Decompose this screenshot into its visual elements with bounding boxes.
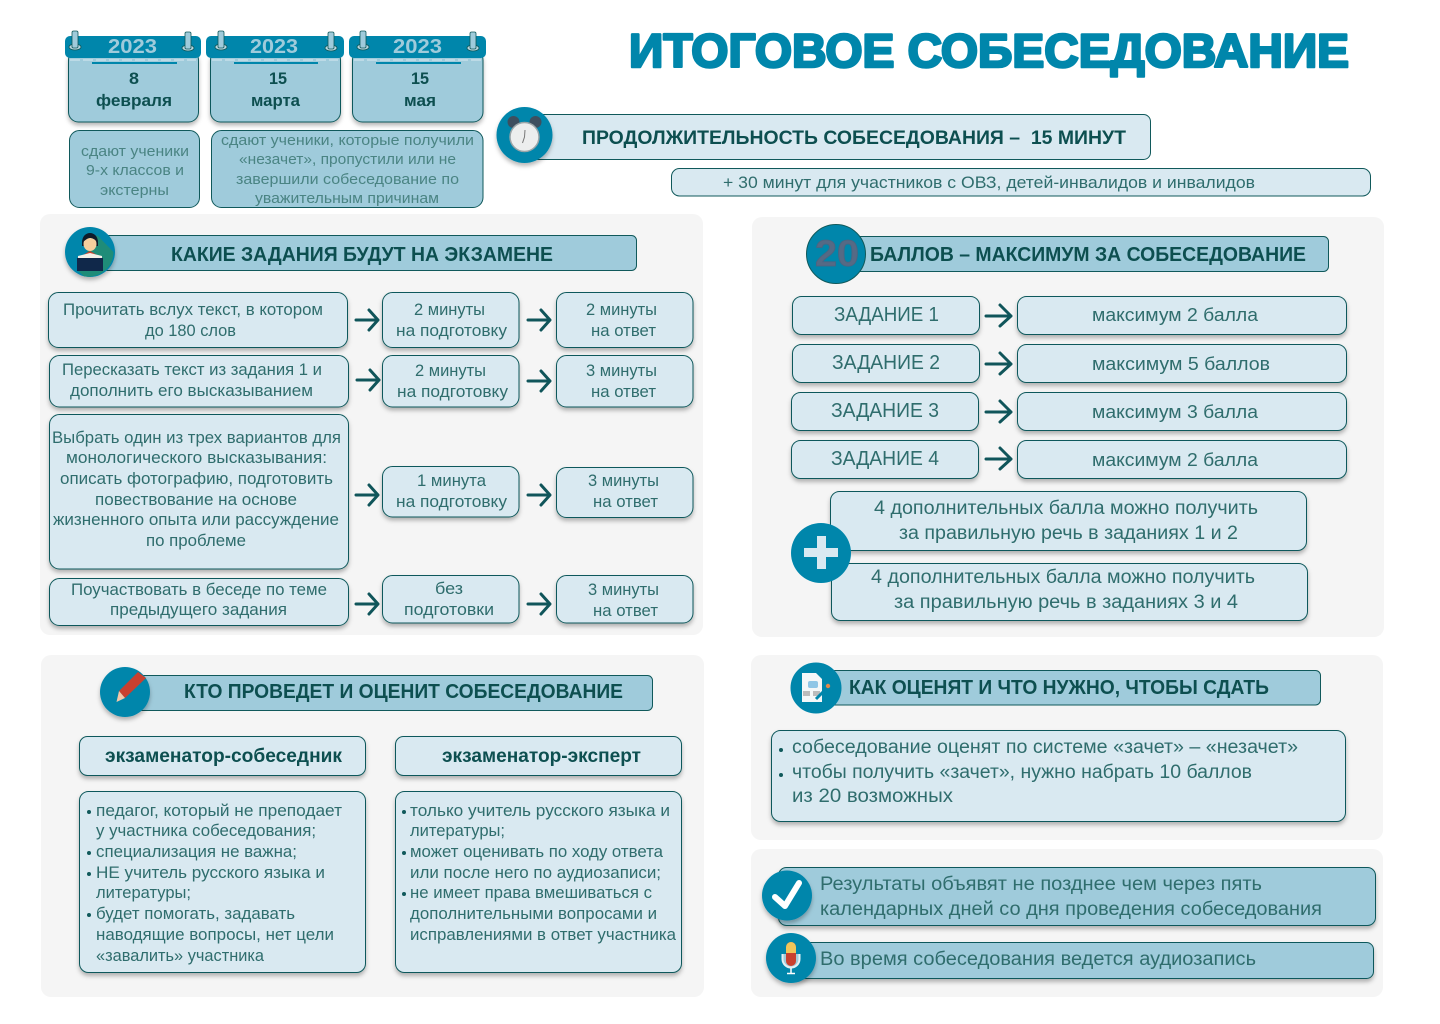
calendar: 15 марта: 15 — [269, 69, 287, 88]
note: кто сдаёт 15 марта и 15 мая: «незачет», пропустили или не — [239, 151, 456, 168]
extra time note — [672, 168, 1370, 196]
duration banner: ПРОДОЛЖИТЕЛЬНОСТЬ СОБЕСЕДОВАНИЯ – 15 МИНУТ — [582, 128, 1126, 149]
score row: задание 4: максимум 2 балла — [1092, 450, 1259, 470]
bonus points: 4 дополнительных балла можно получить — [874, 498, 1258, 519]
criteria box: чтобы получить «зачет», нужно набрать 10 баллов — [792, 762, 1252, 783]
score row: задание 4: ЗАДАНИЕ 4 — [831, 448, 939, 470]
icon: pencil — [116, 672, 146, 702]
score row: задание 1 — [792, 296, 1346, 334]
note: кто сдаёт 15 марта и 15 мая: сдают ученики, которые получили — [221, 132, 474, 149]
score row: задание 2: максимум 5 баллов — [1092, 354, 1270, 374]
task row 3: 1 минута — [417, 471, 487, 490]
note: кто сдаёт 15 марта и 15 мая: завершили собеседование по — [236, 171, 459, 188]
heading: какие задания: КАКИЕ ЗАДАНИЯ БУДУТ НА ЭКЗАМЕНЕ — [171, 244, 553, 266]
score row: задание 1: максимум 2 балла — [1092, 305, 1259, 325]
task row 3: на подготовку — [396, 492, 508, 511]
task row 2: дополнить его высказыванием — [70, 381, 313, 400]
column: экзаменатор-собеседник — [80, 736, 366, 972]
panel: как оценят — [751, 655, 1383, 840]
score row: задание 2 — [792, 344, 1346, 382]
criteria box: из 20 возможных — [792, 786, 954, 807]
task row 3: описать фотографию, подготовить — [60, 469, 333, 488]
task row 2: 2 минуты — [415, 361, 486, 380]
calendar: 15 мая — [349, 31, 486, 122]
column: экзаменатор-эксперт: или после него по аудиозаписи; — [410, 863, 661, 882]
bonus points: 4 дополнительных балла можно получить — [871, 567, 1255, 588]
calendar: 8 февраля: 8 — [129, 69, 139, 88]
calendar: 15 марта: марта — [251, 91, 301, 110]
callout: аудиозапись — [766, 933, 1374, 983]
task row 1: до 180 слов — [145, 321, 236, 340]
score row: задание 3: ЗАДАНИЕ 3 — [831, 400, 939, 422]
task row 2: Пересказать текст из задания 1 и — [62, 360, 322, 379]
task row 3: 3 минуты — [588, 471, 659, 490]
panel: кто проведет — [41, 655, 704, 997]
title: ИТОГОВОЕ СОБЕСЕДОВАНИЕ — [629, 24, 1349, 77]
note: кто сдаёт 8 февраля — [70, 130, 200, 208]
calendar: 15 марта — [206, 31, 344, 122]
column: экзаменатор-эксперт: дополнительными вопросами и — [410, 904, 657, 923]
task row 4: Поучаствовать в беседе по теме — [71, 580, 327, 599]
icon: microphone — [766, 933, 816, 983]
callout: результаты: Результаты объявят не позднее чем через пять — [820, 874, 1262, 895]
score row: задание 2: ЗАДАНИЕ 2 — [832, 352, 940, 374]
heading: 20 баллов — [806, 224, 1328, 284]
calendar: 15 мая: 2023 — [393, 36, 442, 58]
column: экзаменатор-эксперт: только учитель русского языка и — [410, 801, 670, 820]
task row 2 — [50, 356, 693, 407]
score row: задание 3 — [792, 392, 1346, 430]
heading: кто проведет: КТО ПРОВЕДЕТ И ОЦЕНИТ СОБЕСЕДОВАНИЕ — [184, 681, 623, 703]
icon: document with pen — [802, 673, 830, 702]
panel: баллы — [752, 217, 1384, 637]
column: экзаменатор-эксперт: экзаменатор-эксперт — [442, 746, 641, 767]
icon: plus — [791, 523, 851, 583]
calendar: 15 мая: 15 — [411, 69, 429, 88]
icon: check mark — [762, 870, 812, 920]
column: экзаменатор-эксперт: литературы; — [410, 821, 505, 840]
column: экзаменатор-собеседник: специализация не важна; — [96, 842, 297, 861]
criteria box — [772, 730, 1346, 822]
calendar: 15 марта: 2023 — [250, 36, 298, 58]
bonus points: за правильную речь в заданиях 3 и 4 — [894, 592, 1238, 613]
task row 4: на ответ — [593, 601, 658, 620]
task row 4: без — [435, 579, 463, 598]
callout: результаты — [762, 868, 1376, 926]
task row 4: 3 минуты — [588, 580, 659, 599]
column: экзаменатор-собеседник: педагог, который не преподает — [96, 801, 342, 820]
calendar: 8 февраля — [65, 31, 201, 122]
column: экзаменатор-собеседник: литературы; — [96, 883, 191, 902]
column: экзаменатор-собеседник: наводящие вопросы, нет цели — [96, 925, 334, 944]
task row 2: на ответ — [591, 382, 656, 401]
column: экзаменатор-эксперт: может оценивать по ходу ответа — [410, 842, 664, 861]
score row: задание 3: максимум 3 балла — [1092, 402, 1259, 422]
icon: reader with book — [77, 233, 114, 277]
column: экзаменатор-эксперт: не имеет права вмешиваться с — [410, 883, 652, 902]
task row 3: на ответ — [593, 492, 658, 511]
task row 2: на подготовку — [397, 382, 509, 401]
note: кто сдаёт 8 февраля: 9-х классов и — [86, 162, 184, 179]
heading: как оценят: КАК ОЦЕНЯТ И ЧТО НУЖНО, ЧТОБЫ СДАТЬ — [849, 677, 1269, 699]
task row 1: на подготовку — [396, 321, 508, 340]
task row 4: подготовки — [404, 600, 494, 619]
task row 3: монологического высказывания: — [66, 448, 327, 467]
note: кто сдаёт 8 февраля: экстерны — [100, 182, 169, 199]
column: экзаменатор-эксперт: исправлениями в ответ участника — [410, 925, 677, 944]
column: экзаменатор-собеседник: у участника собеседования; — [96, 821, 316, 840]
task row 4: предыдущего задания — [110, 600, 287, 619]
note: кто сдаёт 8 февраля: сдают ученики — [81, 143, 189, 160]
task row 3: жизненного опыта или рассуждение — [53, 510, 339, 529]
panel: задания на экзамене — [40, 214, 703, 635]
task row 3: повествование на основе — [95, 490, 297, 509]
column: экзаменатор-собеседник: «завалить» участника — [96, 946, 265, 965]
task row 2: 3 минуты — [586, 361, 657, 380]
bonus points — [791, 492, 1308, 620]
callout: результаты: календарных дней со дня проведения собеседования — [820, 899, 1322, 920]
column: экзаменатор-эксперт — [396, 736, 682, 972]
column: экзаменатор-собеседник: НЕ учитель русского языка и — [96, 863, 325, 882]
task row 3: Выбрать один из трех вариантов для — [52, 428, 341, 447]
duration banner — [496, 107, 1150, 163]
panel: результаты и аудиозапись — [751, 849, 1383, 997]
extra time note: + 30 минут для участников с ОВЗ, детей-инвалидов и инвалидов — [723, 173, 1255, 192]
column: экзаменатор-собеседник: экзаменатор-собеседник — [105, 746, 342, 767]
heading: кто проведет — [100, 667, 652, 717]
task row 1 — [48, 292, 693, 348]
bonus points: за правильную речь в заданиях 1 и 2 — [899, 523, 1238, 544]
heading: 20 баллов: БАЛЛОВ – МАКСИМУМ ЗА СОБЕСЕДОВАНИЕ — [870, 244, 1306, 266]
heading: какие задания — [65, 227, 636, 277]
calendar: 8 февраля: февраля — [96, 91, 172, 110]
note: кто сдаёт 15 марта и 15 мая: уважительным причинам — [255, 190, 439, 207]
score row: задание 1: ЗАДАНИЕ 1 — [834, 304, 939, 326]
calendar: 15 мая: мая — [404, 91, 436, 110]
task row 3: по проблеме — [146, 531, 246, 550]
task row 4 — [50, 576, 693, 626]
callout: аудиозапись: Во время собеседования ведется аудиозапись — [820, 949, 1256, 970]
task row 1: 2 минуты — [414, 300, 485, 319]
icon: alarm clock — [508, 116, 542, 152]
task row 1: на ответ — [591, 321, 656, 340]
note: кто сдаёт 15 марта и 15 мая — [212, 130, 483, 208]
criteria box: собеседование оценят по системе «зачет» – «незачет» — [792, 737, 1298, 758]
task row 3 — [50, 414, 693, 569]
calendar: 8 февраля: 2023 — [108, 36, 157, 58]
score row: задание 4 — [792, 440, 1346, 478]
column: экзаменатор-собеседник: будет помогать, задавать — [96, 904, 295, 923]
heading: 20 баллов: 20 — [815, 233, 859, 274]
task row 1: Прочитать вслух текст, в котором — [63, 300, 323, 319]
task row 1: 2 минуты — [586, 300, 657, 319]
heading: как оценят — [791, 663, 1320, 713]
